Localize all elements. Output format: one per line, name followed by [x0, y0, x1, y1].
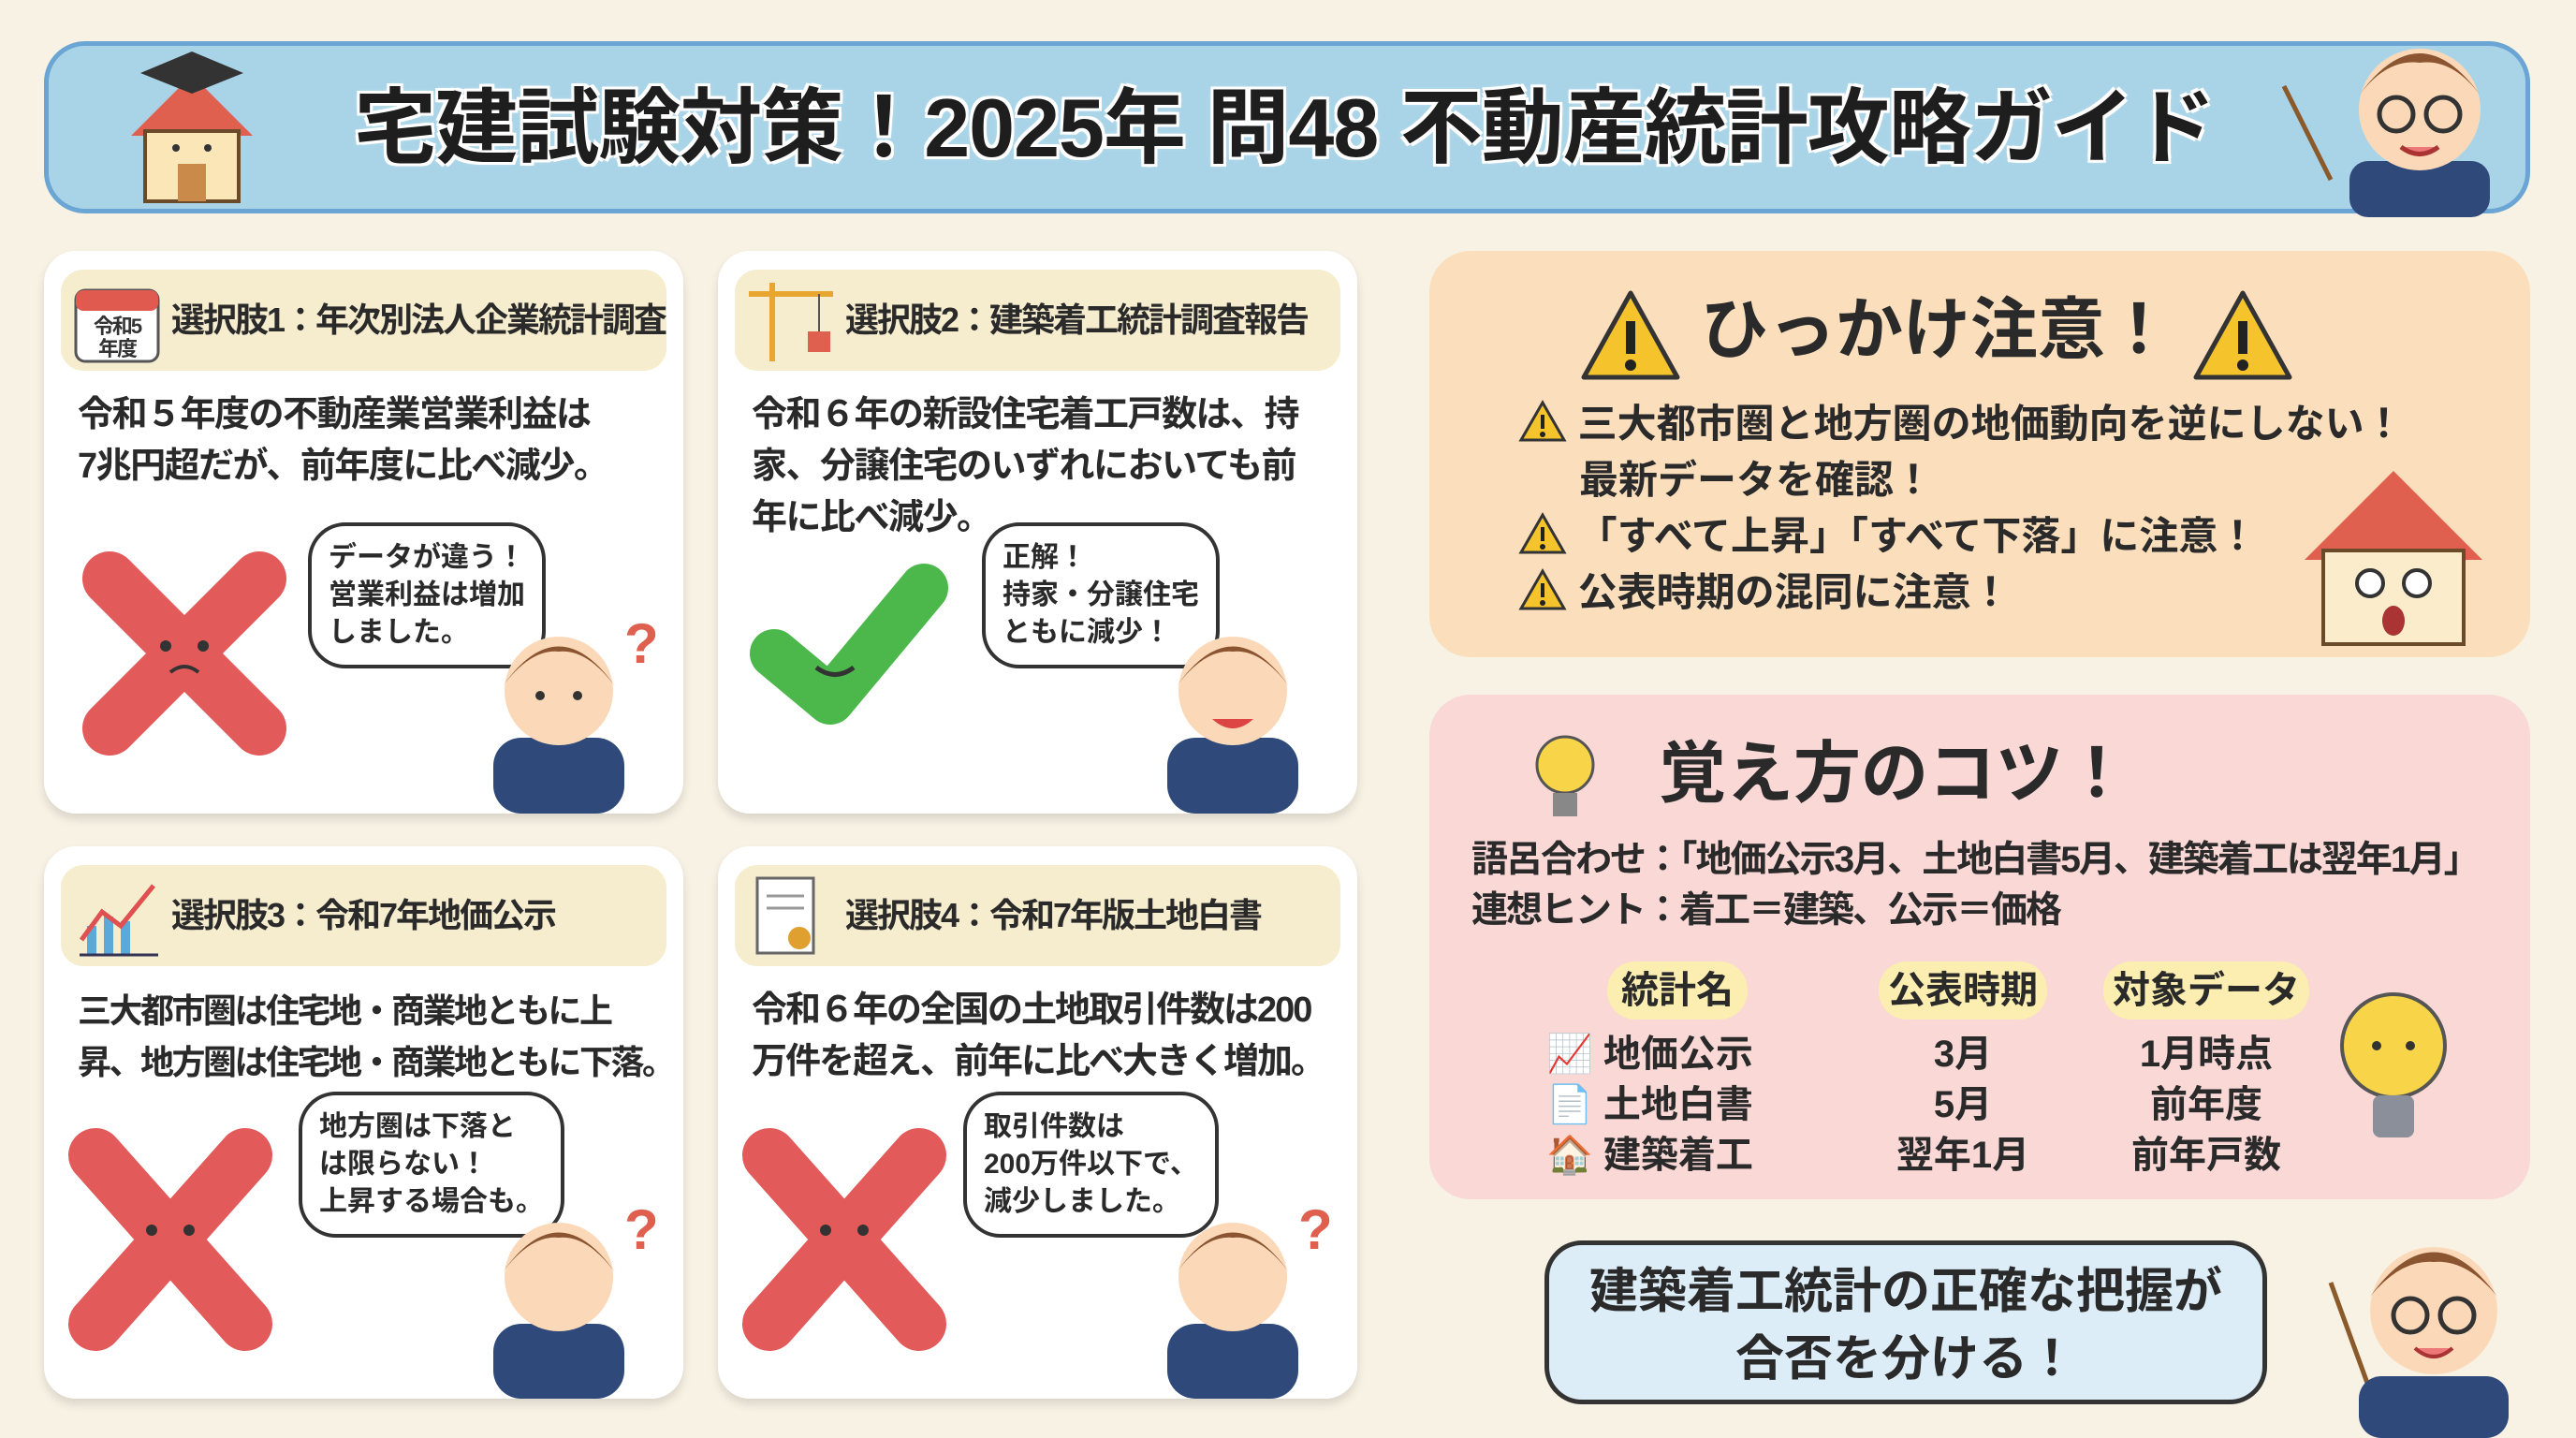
table: 🏠 建築着工 — [1546, 1135, 1753, 1176]
card text 4 — [752, 990, 1325, 1081]
panel: choice 1 — [44, 251, 683, 814]
icon: red X — [68, 1128, 272, 1351]
icon: red X — [742, 1128, 946, 1351]
icon: house with graduation cap — [131, 51, 253, 203]
icon: surprised house — [2305, 471, 2482, 646]
card text 4: 令和６年の全国の土地取引件数は200 — [752, 990, 1310, 1030]
card header 1: 令和5 — [94, 315, 142, 338]
card text 3 — [78, 991, 674, 1081]
table: 前年度 — [2150, 1084, 2262, 1125]
card text 2: 令和６年の新設住宅着工戸数は、持 — [752, 395, 1298, 434]
card header 1 — [61, 270, 666, 371]
icon: light bulb large — [2340, 992, 2447, 1137]
table: 対象データ — [2113, 970, 2300, 1011]
panel: trap warnings — [1429, 251, 2530, 657]
bubble 4: 200万件以下で、 — [984, 1149, 1198, 1180]
card text 1 — [78, 395, 607, 486]
table: 公表時期 — [1888, 970, 2038, 1011]
bubble 3: 上昇する場合も。 — [319, 1186, 544, 1217]
panel: choice 3 — [44, 846, 683, 1399]
warning title — [1582, 290, 2291, 380]
card text 3: 昇、地方圏は住宅地・商業地ともに下落。 — [78, 1043, 674, 1081]
table: 前年戸数 — [2131, 1135, 2281, 1176]
warning list: 「すべて上昇」「すべて下落」に注意！ — [1578, 514, 2257, 558]
table: 1月時点 — [2140, 1034, 2273, 1075]
icon: confused student: ? — [624, 1198, 659, 1261]
bubble 4 — [963, 1092, 1219, 1238]
card text 3: 三大都市圏は住宅地・商業地ともに上 — [78, 991, 611, 1030]
warning list: 三大都市圏と地方圏の地価動向を逆にしない！ — [1578, 402, 2404, 446]
mnemonic text: 連想ヒント：着工＝建築、公示＝価格 — [1471, 890, 2060, 931]
icon: red X — [82, 551, 286, 756]
card text 2: 家、分譲住宅のいずれにおいても前 — [752, 447, 1295, 486]
callout: bottom speech bubble — [1544, 1240, 2267, 1404]
bubble 1: データが違う！ — [329, 542, 525, 573]
panel: choice 4 — [718, 846, 1357, 1399]
card text 4: 万件を超え、前年に比べ大きく増加。 — [752, 1042, 1325, 1081]
card header 1: 年度 — [98, 337, 138, 360]
header banner — [44, 41, 2530, 213]
table: 📈 地価公示 — [1546, 1034, 1753, 1075]
warning list: 公表時期の混同に注意！ — [1578, 570, 2011, 614]
card header 4: 選択肢4：令和7年版土地白書 — [845, 896, 1261, 934]
card header 1: 選択肢1：年次別法人企業統計調査 — [171, 301, 666, 339]
icon: confused student: ? — [1298, 1198, 1333, 1261]
bubble 3: は限らない！ — [319, 1149, 488, 1180]
bubble 2: 正解！ — [1003, 542, 1087, 573]
table: 3月 — [1934, 1034, 1992, 1075]
mnemonic text — [1471, 840, 2479, 931]
icon: happy student — [1167, 637, 1298, 814]
icon: teacher bottom-right — [2329, 1247, 2509, 1438]
table: 翌年1月 — [1896, 1135, 2029, 1176]
card text 1: 7兆円超だが、前年度に比べ減少。 — [78, 447, 607, 486]
bubble 4: 減少しました。 — [984, 1186, 1180, 1217]
icon: teacher top-right — [2282, 49, 2490, 217]
card header 4 — [735, 865, 1340, 966]
title: 宅建試験対策！2025年 問48 不動産統計攻略ガイド — [354, 81, 2215, 174]
card text 1: 令和５年度の不動産業営業利益は — [78, 395, 591, 434]
bubble 1 — [308, 522, 546, 668]
panel: choice 2 — [718, 251, 1357, 814]
bubble 3: 地方圏は下落と — [319, 1111, 516, 1142]
table: 統計名 — [1621, 970, 1734, 1011]
icon: light bulb small — [1535, 736, 1595, 816]
bubble 1: 営業利益は増加 — [329, 580, 525, 610]
table — [1546, 961, 2309, 1176]
icon: confused student — [1167, 1198, 1333, 1399]
icon: green check — [750, 564, 948, 725]
mnemonic text: 語呂合わせ：「地価公示3月、土地白書5月、建築着工は翌年1月」 — [1471, 840, 2479, 880]
bubble 3 — [299, 1092, 564, 1238]
card header 2: 選択肢2：建築着工統計調査報告 — [845, 301, 1308, 339]
icon: confused student — [493, 1198, 659, 1399]
bubble 4: 取引件数は — [984, 1111, 1124, 1142]
card text 2: 年に比べ減少。 — [752, 498, 991, 537]
bubble 2: ともに減少！ — [1003, 617, 1171, 648]
warning title: ひっかけ注意！ — [1701, 293, 2173, 368]
icon: confused student: ? — [624, 612, 659, 675]
table: 📄 土地白書 — [1546, 1084, 1753, 1125]
callout: bottom speech bubble: 合否を分ける！ — [1735, 1332, 2076, 1387]
card header 3 — [61, 865, 666, 966]
bubble 1: しました。 — [329, 617, 469, 648]
card text 2 — [752, 395, 1299, 537]
icon: confused student — [493, 612, 659, 814]
table: 5月 — [1934, 1084, 1992, 1125]
bubble 2: 持家・分譲住宅 — [1003, 580, 1199, 610]
warning list: 最新データを確認！ — [1579, 458, 1933, 502]
tips title: 覚え方のコツ！ — [1659, 737, 2130, 812]
card header 3: 選択肢3：令和7年地価公示 — [171, 896, 555, 934]
warning list — [1518, 400, 2404, 614]
card header 2 — [735, 270, 1340, 371]
panel: memory tips — [1429, 695, 2530, 1199]
bubble 2 — [982, 522, 1220, 668]
callout: bottom speech bubble: 建築着工統計の正確な把握が — [1589, 1265, 2222, 1319]
